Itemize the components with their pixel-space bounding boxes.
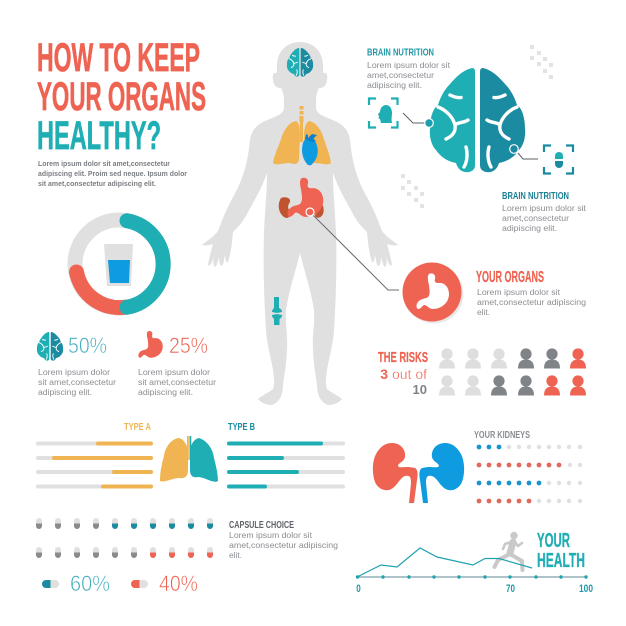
brain nutrition text: bottom: Lorem ipsum dolor sit bbox=[502, 204, 587, 213]
intro text: sit amet,consectetur adipiscing elit. bbox=[38, 179, 156, 188]
icon: kidneys bbox=[373, 443, 464, 503]
icon: face scan bbox=[369, 98, 398, 128]
type b bars bbox=[229, 444, 343, 486]
intro text bbox=[38, 159, 187, 188]
stat: 60% capsule: 60% bbox=[70, 571, 110, 596]
stat: 50% brain bbox=[37, 332, 116, 397]
risks label: THE RISKS bbox=[378, 349, 428, 366]
brain nutrition text: bottom: amet,consectetur bbox=[502, 214, 569, 223]
type a bars bbox=[38, 444, 151, 486]
icon: lungs bbox=[160, 436, 218, 482]
risks pictogram bbox=[439, 348, 586, 396]
capsule choice text: Lorem ipsum dolor sit bbox=[229, 531, 313, 540]
stat: 50% brain: 50% bbox=[68, 333, 107, 358]
your organs text: elit. bbox=[477, 308, 490, 317]
axis labels: 100 bbox=[579, 583, 593, 595]
decorative dots: top right bbox=[530, 45, 553, 79]
your organs text: YOUR ORGANS bbox=[476, 269, 544, 286]
decorative dots: middle bbox=[401, 174, 424, 208]
capsule choice text bbox=[229, 519, 338, 560]
brain nutrition text: bottom: adipiscing elit. bbox=[502, 224, 557, 233]
your organs circle with stomach icon bbox=[402, 262, 464, 324]
stat: 50% brain: Lorem ipsum dolor bbox=[38, 368, 110, 377]
stat: 25% stomach: adipiscing elit. bbox=[138, 388, 193, 397]
risks label bbox=[378, 349, 428, 397]
brain nutrition text: bottom: BRAIN NUTRITION bbox=[502, 190, 569, 202]
icon: kidneys behind stomach bbox=[279, 197, 324, 218]
your organs text: Lorem ipsum dolor sit bbox=[477, 288, 561, 297]
icon: heart bbox=[302, 134, 318, 165]
human body silhouette bbox=[202, 42, 398, 405]
icon: capsule scan bbox=[544, 146, 573, 174]
stat: 50% brain: adipiscing elit. bbox=[38, 388, 92, 397]
health line chart bbox=[356, 548, 588, 579]
risks label: 10 bbox=[413, 382, 427, 397]
your kidneys heading: YOUR KIDNEYS bbox=[474, 429, 530, 441]
your health heading: HEALTH bbox=[537, 550, 585, 572]
axis labels: 0 bbox=[356, 583, 361, 595]
icon: runner bbox=[494, 532, 522, 570]
stat: 60% capsule bbox=[42, 571, 110, 596]
title: HOW TO KEEP bbox=[37, 36, 200, 80]
brain nutrition text: top: BRAIN NUTRITION bbox=[367, 46, 434, 58]
capsule choice text: elit. bbox=[229, 551, 242, 560]
capsule grid bbox=[36, 518, 213, 558]
intro text: Lorem ipsum dolor sit amet,consectetur bbox=[38, 159, 170, 168]
icon: lungs and trachea in chest bbox=[273, 106, 331, 164]
connector: brain to face icon bbox=[403, 113, 433, 127]
stat: 25% stomach: 25% bbox=[169, 333, 208, 358]
kidney dot chart bbox=[477, 445, 582, 503]
brain nutrition text: top: amet,consectetur bbox=[367, 71, 434, 80]
icon: brain in head bbox=[287, 48, 313, 77]
brain nutrition text: bottom bbox=[502, 190, 587, 233]
title bbox=[37, 36, 206, 158]
your organs text: amet,consectetur adipiscing bbox=[477, 298, 586, 307]
your organs text bbox=[476, 269, 586, 317]
donut chart with water glass bbox=[75, 220, 163, 308]
stat: 40% capsule: 40% bbox=[159, 571, 198, 596]
intro text: adipiscing elit. Proim sed neque. Ipsum dolor bbox=[38, 169, 187, 178]
stat: 50% brain: sit amet,consectetur bbox=[38, 378, 116, 387]
icon: stomach in body bbox=[288, 178, 323, 217]
stat: 25% stomach bbox=[138, 331, 216, 397]
type b heading: TYPE B bbox=[228, 421, 255, 433]
stat: 40% capsule bbox=[131, 571, 198, 596]
your health heading bbox=[537, 530, 585, 572]
brain nutrition text: top: Lorem ipsum dolor sit bbox=[367, 61, 451, 70]
risks label: 3 out of bbox=[380, 366, 427, 382]
axis labels bbox=[356, 583, 593, 595]
title: YOUR ORGANS bbox=[37, 75, 206, 119]
stat: 25% stomach: sit amet,consectetur bbox=[138, 378, 216, 387]
brain nutrition text: top: adipiscing elit. bbox=[367, 81, 422, 90]
icon: knee joint bbox=[272, 297, 282, 325]
capsule choice text: CAPSULE CHOICE bbox=[229, 519, 294, 531]
brain nutrition text: top bbox=[367, 46, 451, 90]
large brain bbox=[430, 68, 525, 172]
connector: brain to capsule icon bbox=[510, 145, 538, 159]
connector: stomach to your organs bbox=[306, 208, 399, 290]
title: HEALTHY? bbox=[37, 114, 161, 158]
capsule choice text: amet,consectetur adipiscing bbox=[229, 541, 338, 550]
stat: 25% stomach: Lorem ipsum dolor bbox=[138, 368, 210, 377]
axis labels: 70 bbox=[506, 583, 515, 595]
type a heading: TYPE A bbox=[124, 421, 151, 433]
your health heading: YOUR bbox=[537, 530, 570, 552]
